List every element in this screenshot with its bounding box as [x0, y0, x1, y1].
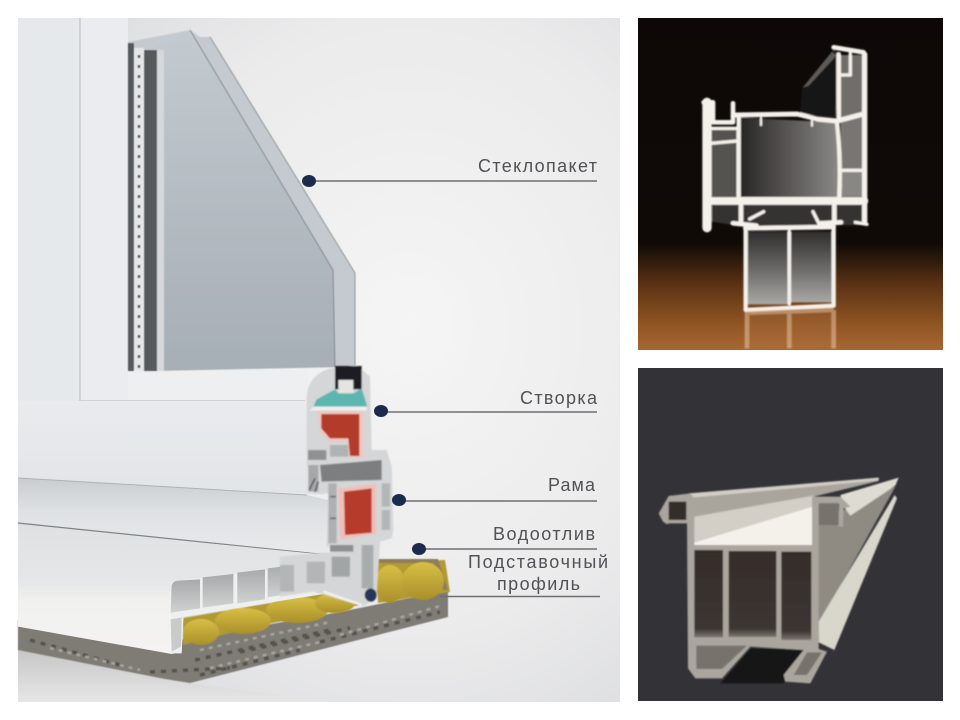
red chamber upper — [317, 411, 363, 457]
long top rail — [840, 478, 899, 516]
side fin — [819, 495, 897, 650]
concrete base — [18, 590, 448, 683]
far rail — [669, 478, 879, 517]
profile photo — [659, 478, 899, 683]
panel: profile on dark brown background — [638, 18, 943, 350]
frame and sash cross-section — [280, 365, 393, 607]
chambers — [694, 550, 723, 637]
glass bead — [800, 50, 840, 117]
window frame face — [18, 478, 328, 555]
red chamber lower — [338, 484, 376, 539]
front section — [659, 493, 850, 683]
shadow under profile — [720, 648, 817, 683]
profile walls — [704, 47, 867, 310]
panel: profile on dark grey background — [638, 368, 943, 701]
double glazing unit — [128, 30, 355, 371]
inner floor — [694, 507, 813, 547]
inner back wall — [694, 496, 814, 542]
web — [815, 487, 895, 648]
panel: window cutaway — [18, 18, 620, 702]
grey chamber — [320, 460, 382, 482]
teal glazing bead — [313, 388, 367, 407]
gasket and spacer — [335, 366, 362, 393]
label: Рама: Рама — [548, 475, 596, 495]
profile section photo — [704, 47, 867, 348]
label: Подставочный профиль: профиль — [497, 574, 580, 594]
label: Водоотлив: Водоотлив — [493, 524, 595, 544]
floor shadow — [18, 645, 330, 702]
drip seal — [365, 588, 377, 602]
window sash face — [18, 18, 325, 495]
reflection — [745, 310, 835, 348]
chambers — [710, 55, 864, 304]
label: Подставочный профиль — [468, 552, 608, 594]
callout lines — [302, 175, 600, 596]
windowsill — [18, 525, 357, 654]
label: Створка: Створка — [520, 388, 598, 408]
foam insulation — [183, 559, 450, 645]
label: Стеклопакет: Стеклопакет — [478, 156, 597, 176]
label: Подставочный профиль: Подставочный — [468, 552, 608, 572]
